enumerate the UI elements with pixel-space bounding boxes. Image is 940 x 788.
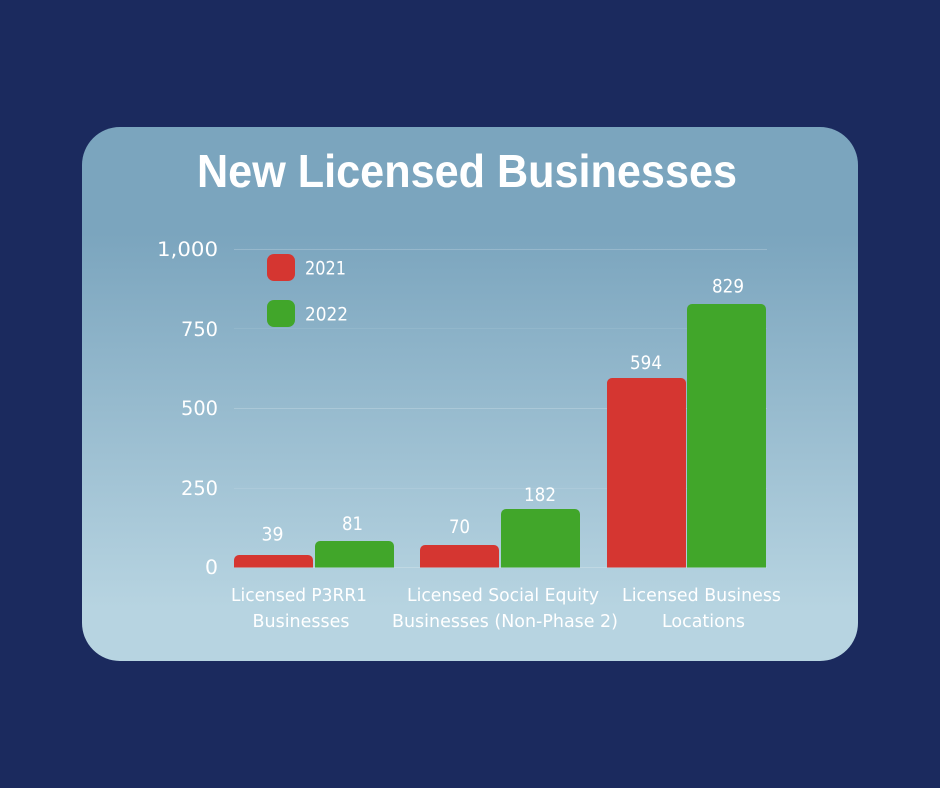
bar group: Licensed Business Locations: [607, 277, 766, 568]
x axis label: Licensed Social Equity Businesses (Non-Phase 2): Licensed Social Equity: [407, 585, 599, 606]
x axis label: Licensed Business Locations: [622, 585, 781, 632]
legend label: 2022: 2022: [305, 304, 348, 326]
bar group: Licensed P3RR1 Businesses: [234, 514, 394, 568]
legend label: 2021: 2021: [305, 258, 346, 280]
y axis labels: 500: [181, 397, 218, 420]
value: 829: 829: [712, 277, 744, 298]
legend swatch: 2021: [267, 254, 295, 281]
value: 39: 39: [262, 524, 284, 546]
y axis labels: 750: [181, 318, 218, 341]
y axis labels: 0: [205, 556, 218, 579]
legend swatch: 2022: [267, 300, 295, 327]
bar: 2022, 182: [501, 509, 580, 568]
value: 594: 594: [630, 353, 662, 374]
value: 70: 70: [449, 517, 470, 538]
x axis label: Licensed P3RR1 Businesses: Licensed P3RR1: [231, 585, 367, 606]
bar: 2021, 39: [234, 555, 313, 568]
value: 182: 182: [524, 485, 556, 506]
x axis label: Licensed P3RR1 Businesses: [231, 585, 367, 632]
y axis labels: 1,000: [157, 238, 218, 261]
x axis label: Licensed Business Locations: Locations: [662, 611, 745, 632]
y axis labels: 250: [181, 477, 218, 500]
bar: 2022, 81: [315, 541, 394, 568]
panel: chart card: [82, 127, 858, 661]
title: New Licensed Businesses: [197, 145, 737, 197]
bar group: Licensed Social Equity Businesses: [420, 485, 580, 568]
legend: [267, 254, 348, 327]
x axis label: Licensed Social Equity Businesses (Non-Phase 2): Businesses (Non-Phase 2): [392, 611, 618, 632]
y axis labels: [157, 238, 218, 579]
bar: 2022, 829: [687, 304, 766, 568]
bar: 2021, 70: [420, 545, 499, 568]
value: 81: 81: [342, 514, 363, 535]
x axis label: Licensed P3RR1 Businesses: Businesses: [252, 611, 350, 632]
bar: 2021, 594: [607, 378, 686, 568]
x axis label: Licensed Business Locations: Licensed Business: [622, 585, 781, 606]
x axis label: Licensed Social Equity Businesses (Non-Phase 2): [392, 585, 618, 632]
